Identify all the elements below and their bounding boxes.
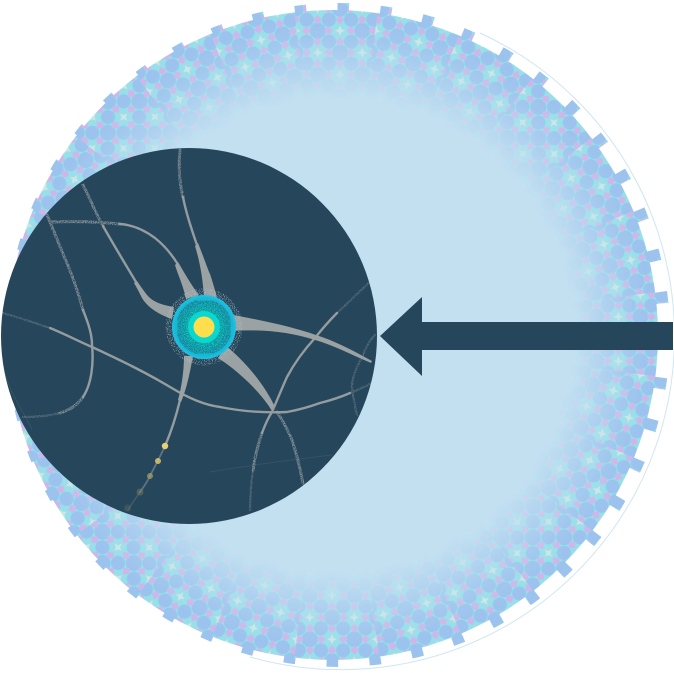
- thick tapering roots: [134, 243, 372, 411]
- neuron processes: [3, 150, 375, 512]
- strong branches: [50, 197, 350, 446]
- faint branches near edge: [3, 280, 375, 510]
- thin outer ring arc: [250, 33, 674, 670]
- synaptic beads: [124, 443, 168, 512]
- tapered end to lower tip: [140, 446, 165, 492]
- dark circle background: [1, 148, 377, 524]
- dark circle with neuron: [1, 148, 377, 524]
- neuron cell body: [169, 292, 239, 362]
- speckled halo: [169, 292, 239, 362]
- yellow nucleus: [194, 316, 214, 338]
- fine distal branches: [3, 367, 332, 472]
- outer membrane and nucleus gradient: [172, 295, 236, 359]
- speckled dark ring: [182, 305, 226, 349]
- arrow pointing at dark circle: [380, 297, 673, 376]
- mid branches: [47, 150, 303, 483]
